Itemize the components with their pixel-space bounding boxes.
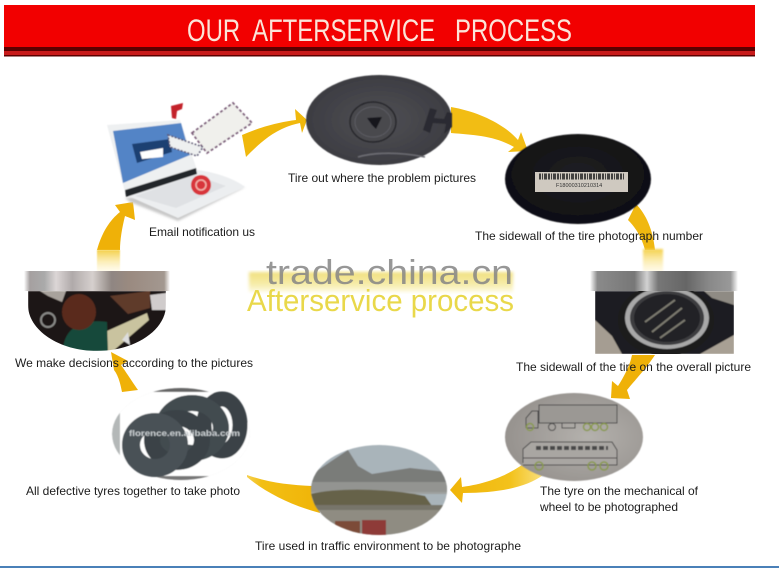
photo: barcode on sidewall	[505, 134, 651, 224]
blurred band	[590, 271, 738, 291]
arrow: trucks to landscape	[450, 465, 543, 503]
laptop hinge	[125, 168, 197, 197]
caption: email notification: Email notification us	[149, 225, 255, 239]
photo: defective inner tubes	[112, 388, 250, 480]
laptop shadow and base	[125, 187, 245, 221]
arrow: barcode to right photo	[628, 204, 655, 250]
caption: mechanical wheel: The tyre on the mechanical of	[540, 484, 699, 498]
watermark on tubes: florence.en.alibaba.com	[129, 428, 240, 438]
caption: overall picture: The sidewall of the tire on the overall picture	[516, 360, 751, 374]
title text: OUR AFTERSERVICE PROCESS	[187, 12, 572, 48]
photo: traffic landscape	[311, 445, 447, 535]
caption: mechanical wheel	[539, 484, 699, 514]
arrow: tubes to people	[111, 352, 138, 392]
photo: damaged tire	[306, 75, 452, 165]
icon: airmail envelopes	[192, 103, 252, 153]
caption: decisions: We make decisions according to the pictures	[15, 356, 253, 370]
arrow fade into people photo	[97, 250, 120, 272]
title banner	[4, 5, 755, 56]
watermark text: trade.china.cn	[266, 254, 513, 292]
blurred band	[24, 271, 170, 291]
heading: afterservice process: Afterservice process	[247, 283, 514, 318]
arrow: tire to barcode	[451, 107, 528, 152]
barcode number: F18000310210314	[556, 183, 602, 189]
icon: at sign badge	[191, 175, 211, 195]
caption: tire problem: Tire out where the problem pictures	[288, 171, 476, 185]
photo: decision meeting	[24, 271, 170, 351]
arrow: landscape to tubes	[247, 475, 320, 513]
caption: traffic environment: Tire used in traffic environment to be photographe	[255, 539, 521, 553]
photo: overall sidewall	[590, 271, 738, 356]
laptop screen lid	[107, 120, 197, 192]
icon: truck	[526, 405, 617, 430]
caption: mechanical wheel: wheel to be photographed	[539, 500, 678, 514]
arrow fade into right photo	[643, 249, 663, 273]
icon: mailbox flag	[171, 103, 183, 119]
arrow: right photo to trucks	[611, 355, 655, 399]
arrow: email to tire	[242, 109, 307, 157]
center watermark title	[247, 254, 514, 318]
photo: truck and bus drawings	[505, 393, 643, 481]
arrow: people to email	[97, 202, 135, 250]
icon: bus	[523, 442, 617, 470]
caption: defective tyres: All defective tyres together to take photo	[26, 484, 240, 498]
caption: photograph number: The sidewall of the tire photograph number	[475, 229, 703, 243]
icon: email laptop	[107, 103, 252, 221]
bottom rule	[0, 566, 779, 568]
